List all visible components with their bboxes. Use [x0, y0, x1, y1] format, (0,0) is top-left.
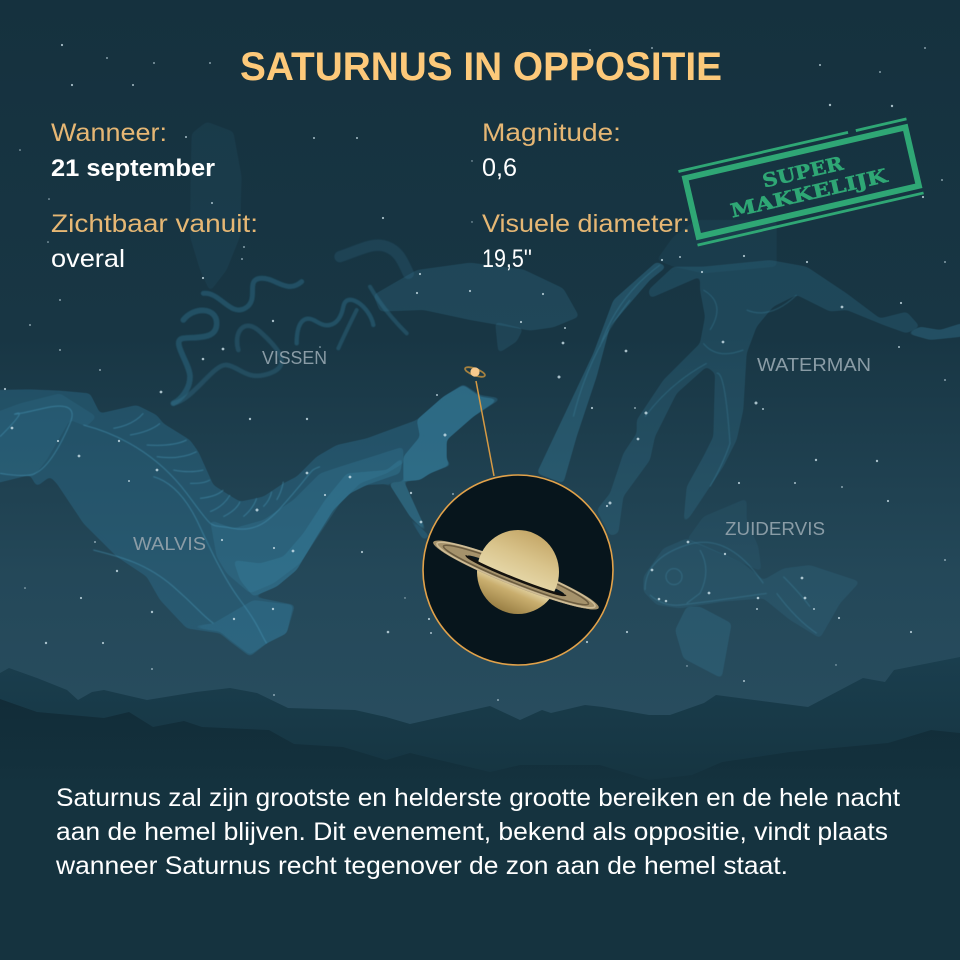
lower background panel: [0, 790, 960, 960]
star field: [4, 44, 946, 701]
front mountain range: [0, 699, 960, 800]
title: SATURNUS IN OPPOSITIE: [240, 45, 722, 89]
pointer line to Saturn: [476, 381, 494, 476]
explanatory text: aan de hemel blijven. Dit evenement, bekend als oppositie, vindt plaats: [56, 818, 888, 846]
fact: visible from: Zichtbaar vanuit:: [51, 210, 258, 238]
constellation: Vissen (fishes): [173, 122, 579, 403]
constellation label: Walvis: WALVIS: [133, 534, 206, 554]
constellation label: Vissen: VISSEN: [262, 348, 327, 368]
stamp: super makkelijk: SUPER: [760, 153, 846, 192]
fact: visible from: [51, 210, 258, 273]
fact: visual diameter: Visuele diameter:: [482, 210, 690, 238]
fact: visual diameter: 19,5'': [482, 245, 532, 273]
constellation: Waterman (water bearer): [537, 220, 960, 536]
fact: magnitude: Magnitude:: [482, 119, 621, 147]
ring front half: [433, 542, 598, 610]
explanatory text: wanneer Saturnus recht tegenover de zon aan de hemel staat.: [55, 852, 788, 880]
constellation label: Zuidervis: ZUIDERVIS: [725, 519, 825, 539]
Saturn globe: [477, 530, 559, 614]
fact: when: [51, 119, 215, 182]
stamp: super makkelijk: [678, 119, 924, 246]
icon: small Saturn in the sky: [464, 364, 486, 380]
explanatory text: [55, 784, 900, 880]
constellation: Walvis (whale): [0, 384, 502, 657]
back mountain range: [0, 657, 960, 800]
fact: when: Wanneer:: [51, 119, 167, 147]
ring back half: [429, 532, 603, 618]
fact: magnitude: 0,6: [482, 154, 517, 182]
Saturn close-up circle: [423, 475, 613, 665]
fact: visible from: overal: [51, 245, 125, 273]
constellation: Zuidervis (southern fish): [643, 498, 860, 678]
fact: when: 21 september: [51, 155, 215, 182]
explanatory text: Saturnus zal zijn grootste en helderste grootte bereiken en de hele nacht: [56, 784, 900, 812]
fact: magnitude: [482, 119, 621, 182]
stamp: super makkelijk: MAKKELIJK: [728, 165, 891, 222]
constellation label: Waterman: WATERMAN: [757, 355, 871, 375]
fact: visual diameter: [482, 210, 690, 273]
